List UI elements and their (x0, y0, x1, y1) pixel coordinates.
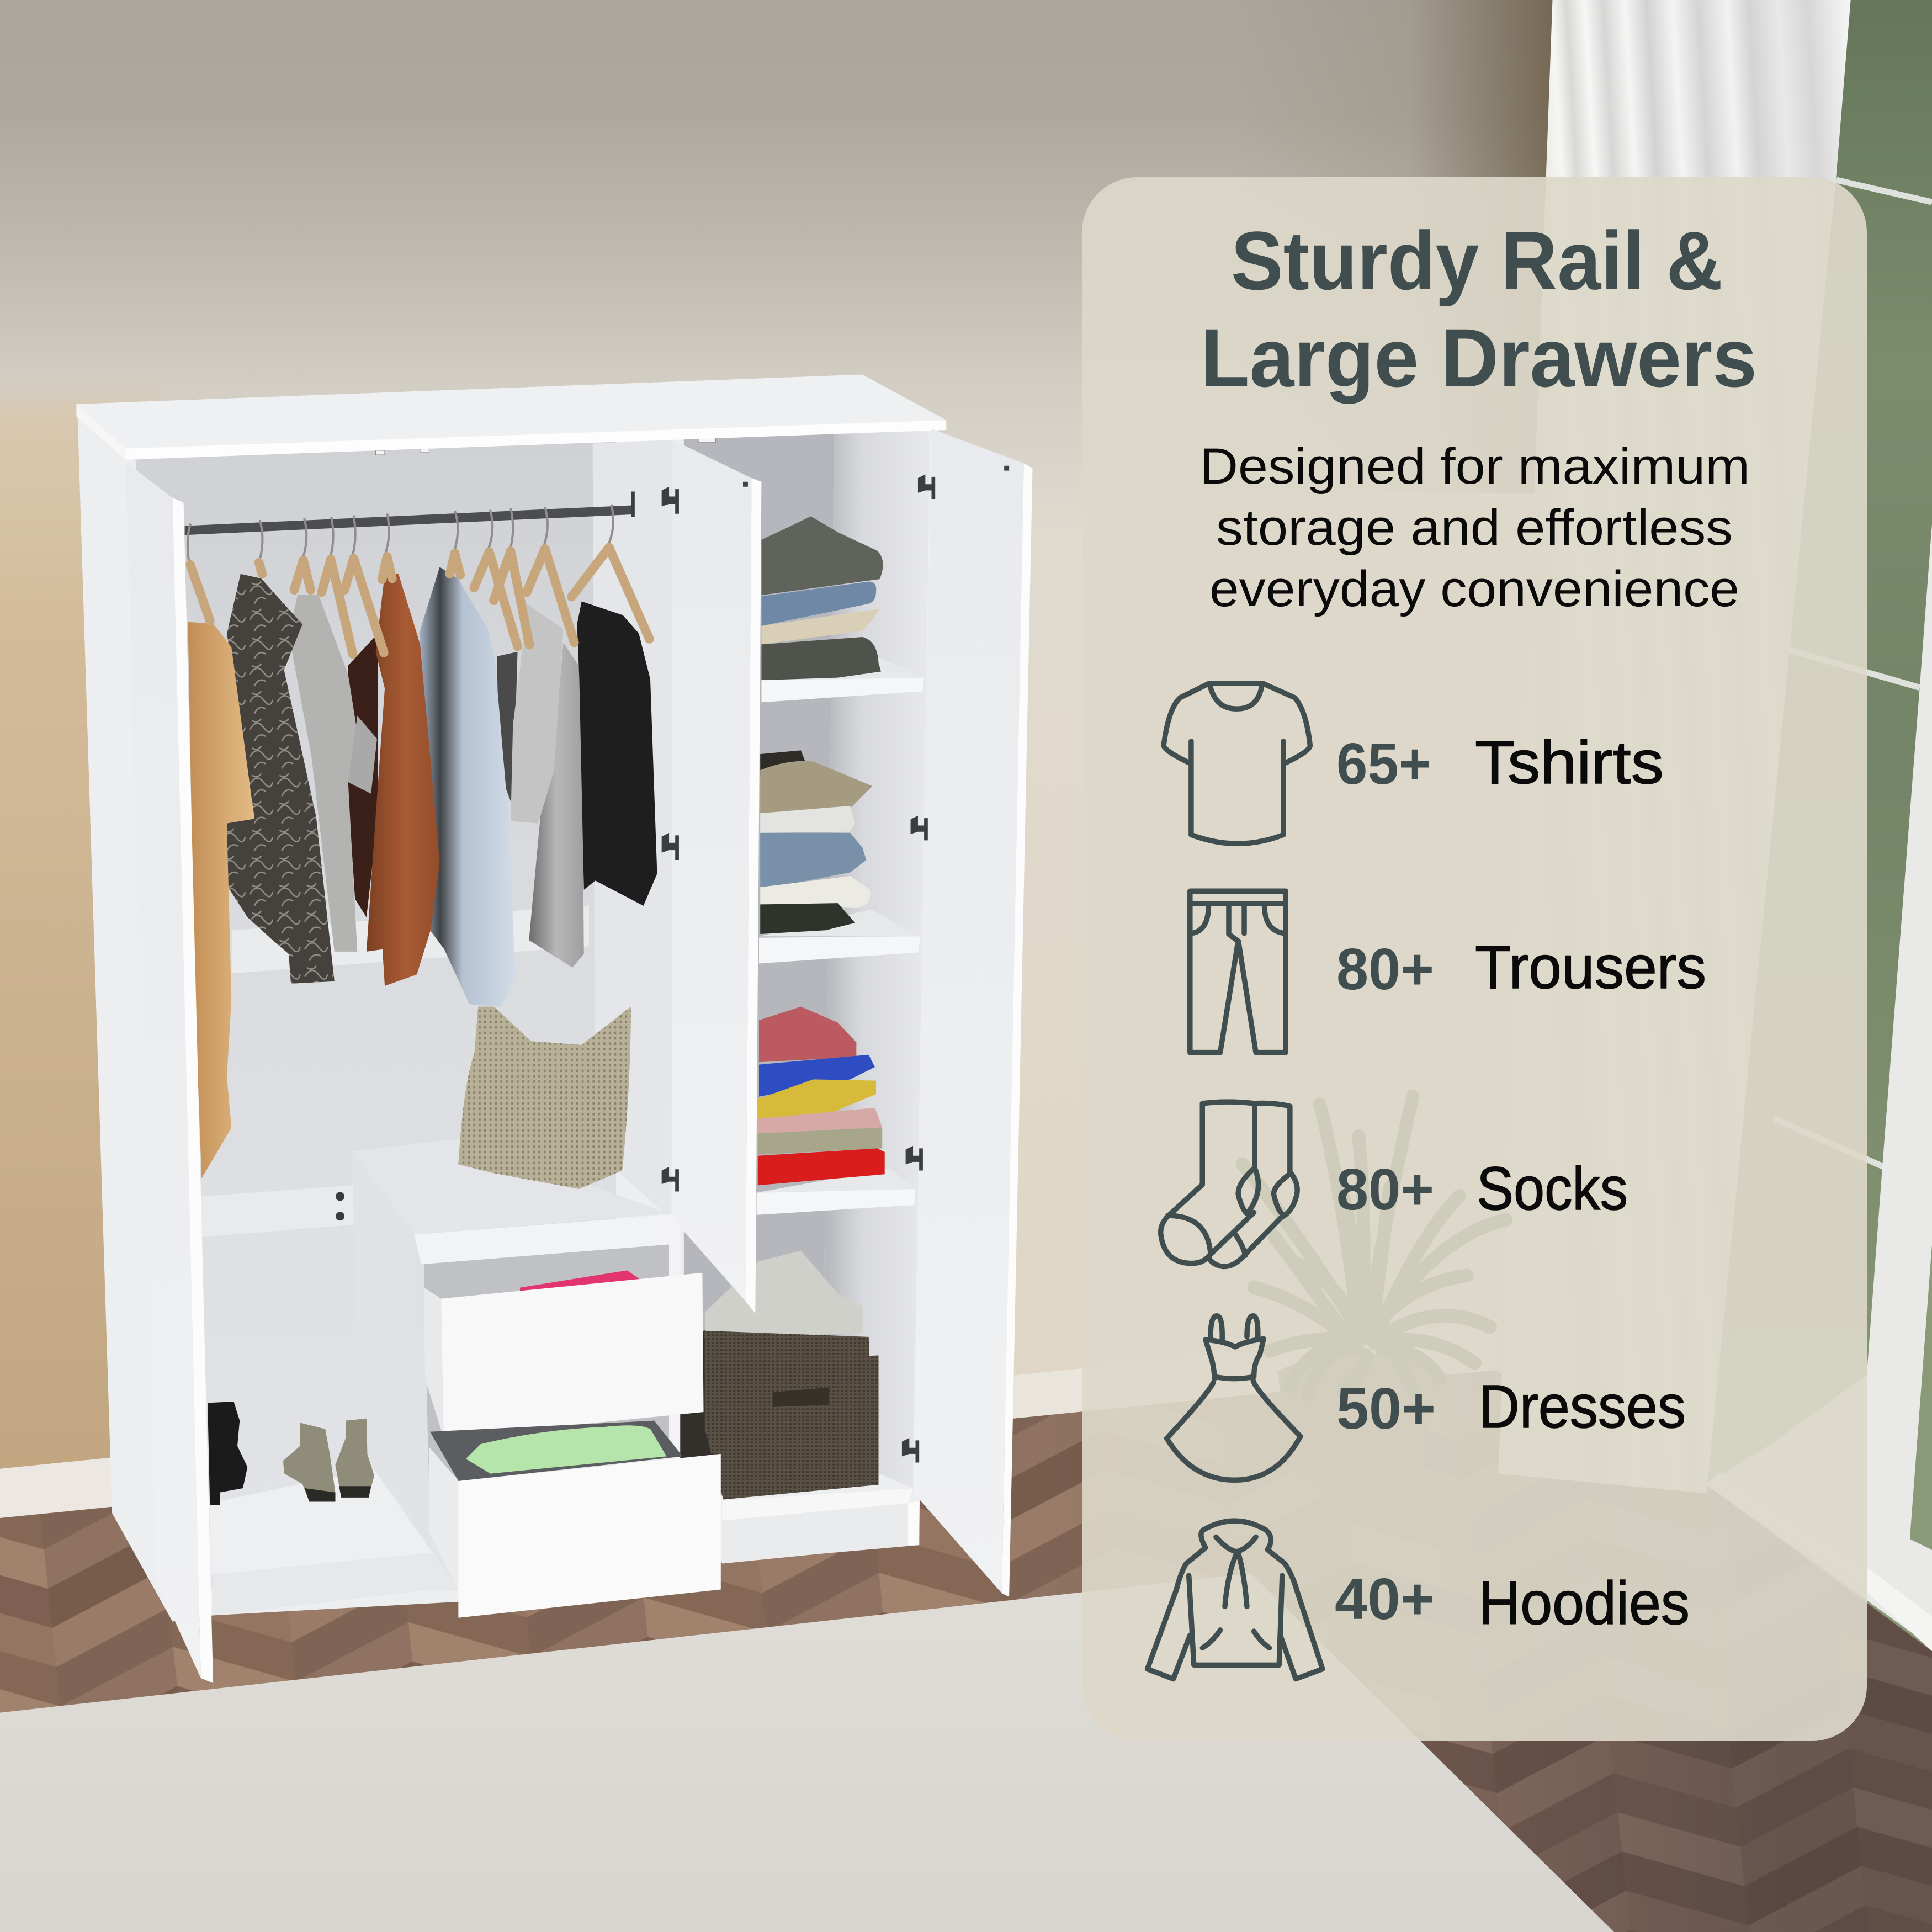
left door inner face (126, 462, 201, 1678)
hanger hooks (188, 505, 613, 561)
middle door inner face (672, 440, 752, 1301)
light grey hoodie (511, 604, 563, 824)
icon: socks (1161, 1102, 1297, 1266)
count: 40+: 40+ (1335, 1567, 1435, 1632)
window sill (1707, 1472, 1932, 1651)
right door inner face (913, 429, 1024, 1593)
divider panel (593, 440, 673, 1220)
window glass (1707, 0, 1932, 1651)
unit side (352, 1151, 426, 1541)
folded clothes stacks (705, 516, 885, 1500)
folded towels (705, 1251, 862, 1338)
long grey garment (529, 643, 584, 968)
lower drawer front (458, 1454, 721, 1618)
black blouse (577, 601, 657, 906)
label: Tshirts: Tshirts (1475, 729, 1664, 797)
count: 80+: 80+ (1336, 1157, 1434, 1222)
fronds (1243, 1096, 1506, 1395)
basket (1277, 1353, 1438, 1494)
wardrobe top board (76, 375, 946, 460)
icon: t-shirt (1164, 683, 1310, 843)
black boot (208, 1402, 247, 1505)
label: Hoodies: Hoodies (1479, 1569, 1690, 1637)
icon: hoodie (1148, 1521, 1323, 1679)
icon: trousers (1190, 891, 1286, 1053)
hanger arms (190, 548, 649, 654)
subheading: storage and effortless (1216, 500, 1733, 556)
label: Dresses: Dresses (1479, 1373, 1686, 1441)
count: 80+: 80+ (1336, 937, 1434, 1002)
leather jacket (367, 574, 445, 986)
olive boot left (283, 1423, 335, 1502)
clothes rail (185, 491, 635, 535)
left plinth (213, 1552, 457, 1615)
outer left side panel (78, 416, 172, 1621)
tan coat (188, 622, 254, 1178)
wardrobe backing silhouette (76, 375, 946, 1622)
lower drawer green clothes (466, 1425, 667, 1474)
unit top (352, 1138, 669, 1235)
stack 1 (761, 516, 883, 680)
right compartment back (684, 431, 834, 1497)
subheading (1199, 438, 1750, 617)
baseboard right (1004, 1327, 1495, 1419)
heading: Sturdy Rail & (1231, 214, 1723, 307)
wall tint left (0, 376, 160, 1540)
shelf 2 (759, 909, 920, 964)
curtain (1498, 0, 1851, 1493)
boot soles (305, 1486, 371, 1502)
panel background (1082, 177, 1867, 1741)
hinges (662, 474, 935, 1463)
top brackets (375, 438, 716, 455)
plant in woven basket (1243, 1096, 1506, 1494)
icon: dress (1167, 1316, 1301, 1480)
count: 65+: 65+ (1336, 731, 1431, 797)
window muntins (1774, 180, 1932, 1167)
upper cross bar (232, 906, 589, 973)
dark garment behind jacket (348, 634, 378, 917)
wardrobe floor shelf (209, 1469, 432, 1575)
row: trousers (1190, 891, 1706, 1053)
panel: storage capacity (1082, 177, 1867, 1741)
shoes (208, 1402, 374, 1505)
right compartment side wall (822, 431, 930, 1492)
label: Socks: Socks (1477, 1155, 1628, 1223)
upper drawer front (441, 1273, 704, 1438)
interior back left compartment (136, 441, 616, 1589)
count: 50+: 50+ (1336, 1376, 1436, 1441)
unit interior (424, 1244, 680, 1479)
dark recess behind drawers (680, 1318, 727, 1493)
small outer glass (1910, 1244, 1932, 1550)
storage basket (705, 1331, 879, 1500)
upper drawer pink clothes (520, 1270, 639, 1291)
shelf 3 (757, 1168, 915, 1215)
unit front rail (414, 1215, 669, 1264)
right door edge (1002, 463, 1033, 1597)
baseboard left (0, 1456, 123, 1518)
wardrobe (76, 375, 1033, 1683)
blue shirt (419, 567, 515, 1006)
bottom shelf and plinth (722, 1466, 919, 1564)
dark shirt (497, 652, 518, 808)
upper drawer side (424, 1288, 444, 1438)
row: dresses (1167, 1316, 1686, 1480)
floor: herringbone parquet (0, 1370, 1932, 1932)
shelf 1 (761, 658, 924, 702)
olive boot right (335, 1419, 374, 1498)
middle door edge (745, 478, 761, 1313)
rug (0, 1573, 1614, 1932)
stack 3 (758, 1007, 885, 1185)
grey shirt (289, 595, 362, 952)
row: tshirts (1164, 683, 1664, 843)
floor shading (862, 1370, 1932, 1932)
left door edge (172, 498, 213, 1683)
stack 2 (760, 750, 872, 934)
door catches (743, 466, 1009, 487)
unit right post (669, 1211, 680, 1466)
drawer unit (352, 1138, 721, 1618)
white frame and far curtain (1707, 524, 1932, 1647)
subheading: everyday convenience (1209, 561, 1739, 617)
heading (1201, 214, 1757, 404)
lower drawer interior (430, 1421, 683, 1481)
wall shadow near curtain (1232, 0, 1555, 493)
hanging clothes (185, 438, 716, 1178)
heading: Large Drawers (1201, 311, 1757, 404)
hangers (188, 505, 649, 654)
window (1707, 0, 1932, 1651)
row: socks (1161, 1102, 1628, 1266)
paisley blouse (227, 574, 335, 984)
lower cross bar with screws (201, 1185, 354, 1237)
subheading: Designed for maximum (1199, 438, 1750, 495)
grey shirt cuff (348, 716, 377, 794)
handbag (458, 1007, 631, 1189)
row: hoodies (1148, 1521, 1690, 1679)
label: Trousers: Trousers (1475, 933, 1706, 1001)
lower drawer side (429, 1447, 458, 1591)
